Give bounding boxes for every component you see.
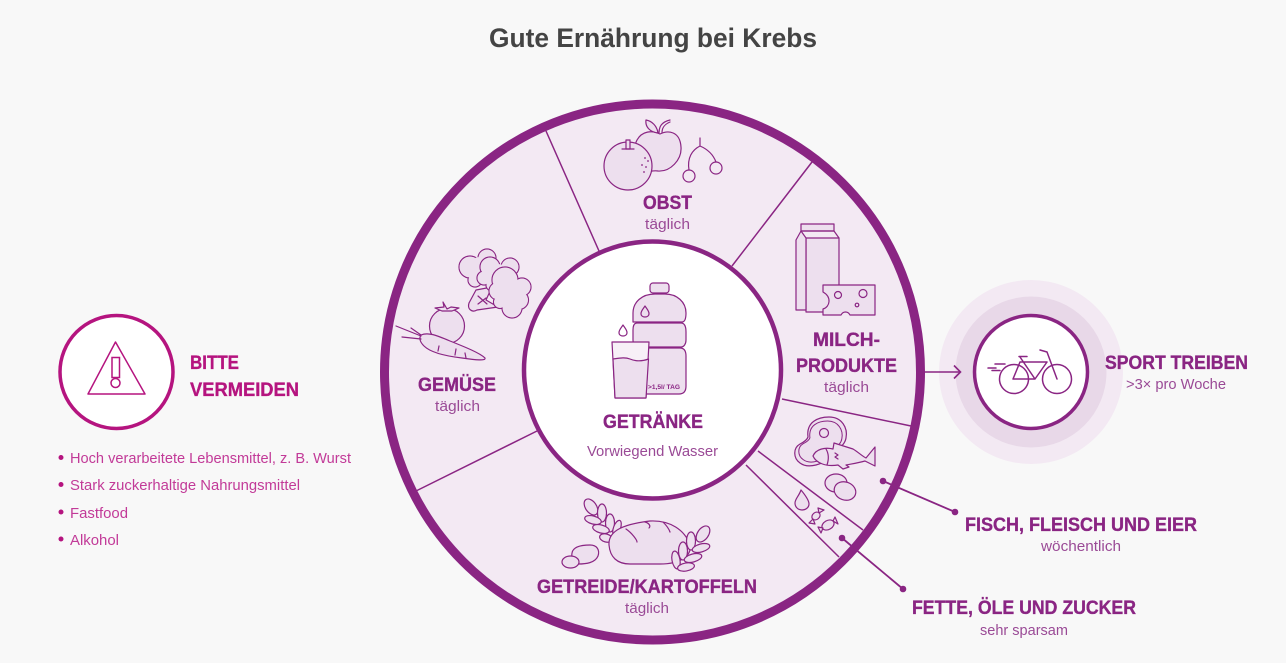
list: foods to avoid: Alkohol (70, 532, 119, 549)
label: getraenke (587, 412, 718, 460)
icon: bread and potatoes (562, 496, 713, 572)
list: foods to avoid: Stark zuckerhaltige Nahrungsmittel (70, 477, 300, 494)
sport label: >3× pro Woche (1126, 376, 1226, 393)
label: getraenke: Vorwiegend Wasser (587, 443, 718, 460)
heading: bitte vermeiden: BITTE (190, 353, 239, 374)
callout: fisch, fleisch und eier (880, 478, 1197, 555)
list: foods to avoid: Hoch verarbeitete Lebensmittel, z. B. Wurst (70, 450, 352, 467)
icon: meat, fish, eggs (795, 417, 875, 503)
callout: fette, oele und zucker: sehr sparsam (980, 622, 1068, 639)
icon: fruit (604, 120, 722, 190)
callout: fette, oele und zucker: FETTE, ÖLE UND ZUCKER (912, 598, 1136, 619)
label: getreide und kartoffeln: täglich (625, 600, 669, 617)
callout: fisch, fleisch und eier: FISCH, FLEISCH UND EIER (965, 515, 1197, 536)
label: milchprodukte (796, 330, 897, 396)
label: milchprodukte: PRODUKTE (796, 356, 897, 377)
label: obst: OBST (643, 193, 692, 214)
heading: bitte vermeiden (190, 353, 299, 401)
title: Gute Ernährung bei Krebs (489, 23, 817, 53)
label: obst: täglich (645, 216, 690, 233)
label: gemuese (418, 375, 496, 415)
label: obst (643, 193, 692, 233)
sport label (1105, 353, 1248, 393)
callout: fisch, fleisch und eier: wöchentlich (1040, 538, 1121, 555)
label: getreide und kartoffeln: GETREIDE/KARTOFFELN (537, 577, 757, 598)
icon: vegetables (396, 249, 531, 360)
icon: water bottle and glass: >1,5l/ TAG (648, 385, 680, 391)
label: getraenke: GETRÄNKE (603, 412, 703, 433)
label: gemuese: GEMÜSE (418, 375, 496, 396)
heading: bitte vermeiden: VERMEIDEN (190, 380, 299, 401)
panel: sport ring (939, 280, 1123, 464)
icon: milk and cheese (796, 224, 875, 315)
label: getreide und kartoffeln (537, 577, 757, 617)
icon: oil drop and candies (795, 490, 838, 533)
label: milchprodukte: MILCH- (813, 330, 880, 351)
icon: warning circle (60, 316, 173, 428)
arrow: to sport (924, 366, 960, 378)
icon: water bottle and glass (612, 283, 686, 398)
label: milchprodukte: täglich (824, 379, 869, 396)
label: gemuese: täglich (435, 398, 480, 415)
list: foods to avoid: Fastfood (70, 505, 128, 522)
panel: food wheel (384, 104, 920, 640)
list: foods to avoid (58, 450, 352, 549)
sport label: SPORT TREIBEN (1105, 353, 1248, 374)
icon: bicycle (988, 350, 1072, 394)
callout: fette, oele und zucker (839, 535, 1136, 639)
